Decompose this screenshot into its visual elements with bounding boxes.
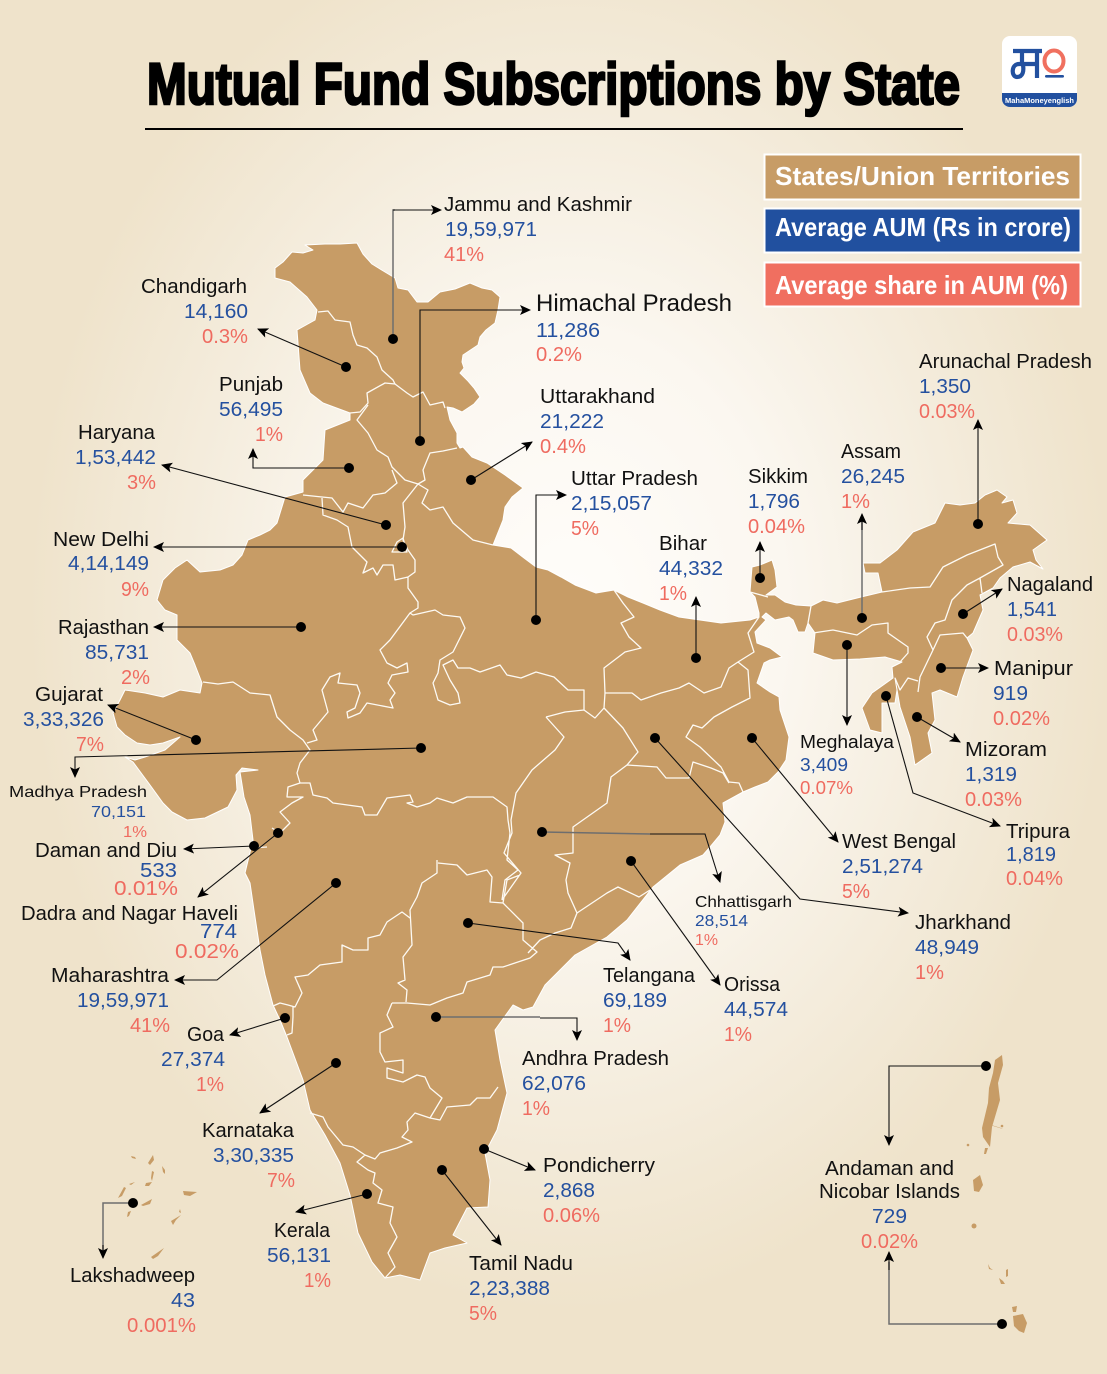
mainland xyxy=(113,243,1047,1280)
callout: Karnataka xyxy=(202,1058,341,1192)
callout: Uttar Pradesh xyxy=(531,468,698,625)
callout: Jammu and Kashmir: 41% xyxy=(444,244,484,266)
callout: Telangana: Telangana xyxy=(603,965,696,987)
callout: Lakshadweep: 0.001% xyxy=(127,1315,196,1337)
callout: West Bengal: 2,51,274 xyxy=(842,856,923,878)
callout: Arunachal Pradesh xyxy=(919,351,1092,529)
callout: Chandigarh xyxy=(141,276,351,372)
callout: Andhra Pradesh: 62,076 xyxy=(522,1073,586,1095)
callout: Assam: Assam xyxy=(841,441,901,463)
callout: Andhra Pradesh xyxy=(431,1012,669,1120)
callout: Tamil Nadu: 2,23,388 xyxy=(469,1278,550,1300)
callout: Meghalaya xyxy=(800,640,895,798)
callout: Pondicherry: Pondicherry xyxy=(543,1155,655,1177)
callout: Bihar: Bihar xyxy=(659,533,707,555)
callout: Meghalaya: Meghalaya xyxy=(800,732,895,752)
callout: Andhra Pradesh: Andhra Pradesh xyxy=(522,1048,669,1070)
callout: Goa: 1% xyxy=(196,1074,224,1096)
callout: New Delhi xyxy=(53,529,407,601)
callout: Mizoram: Mizoram xyxy=(965,739,1047,761)
callout: Punjab: 56,495 xyxy=(219,399,283,421)
legend xyxy=(764,154,1080,306)
callout: Haryana: 3% xyxy=(127,472,156,494)
callout: Sikkim: 0.04% xyxy=(748,516,805,538)
callout: Daman and Diu: 0.01% xyxy=(114,878,178,900)
callout: Chhattisgarh: 1% xyxy=(695,932,718,949)
islands: Andaman and Nicobar xyxy=(967,1055,1027,1333)
callout: Andaman and Nicobar Islands: Andaman and xyxy=(825,1158,954,1180)
callout: Tripura xyxy=(881,691,1071,890)
callout: Arunachal Pradesh: Arunachal Pradesh xyxy=(919,351,1092,373)
callout: Tripura: 1,819 xyxy=(1006,844,1056,866)
callout: Dadra and Nagar Haveli xyxy=(21,828,283,963)
legend: average share xyxy=(764,262,1080,306)
callout: Arunachal Pradesh: 0.03% xyxy=(919,401,975,423)
callout: West Bengal: West Bengal xyxy=(842,831,956,853)
callout: Bihar xyxy=(659,533,723,663)
legend: average share: Average share in AUM (%) xyxy=(775,270,1068,300)
callout: Mizoram: 1,319 xyxy=(965,764,1017,786)
callout: Andaman and Nicobar Islands: Nicobar Islands xyxy=(819,1181,960,1203)
callout: Jammu and Kashmir: Jammu and Kashmir xyxy=(444,194,632,216)
callout: Tripura: 0.04% xyxy=(1006,868,1063,890)
callout: Karnataka: 7% xyxy=(267,1170,295,1192)
callout: Manipur xyxy=(936,658,1073,730)
callout: Dadra and Nagar Haveli: 774 xyxy=(200,921,237,943)
callout: Kerala: 1% xyxy=(304,1270,331,1292)
callout: Dadra and Nagar Haveli: 0.02% xyxy=(175,941,239,963)
callout: Chhattisgarh xyxy=(537,827,792,949)
callout: Andaman and Nicobar Islands: 0.02% xyxy=(861,1231,918,1253)
callout: Rajasthan xyxy=(58,617,306,689)
callout: Meghalaya: 3,409 xyxy=(800,755,848,775)
callout: Nagaland: 0.03% xyxy=(1007,624,1063,646)
callout: Chhattisgarh: Chhattisgarh xyxy=(695,894,792,911)
logo: MahaMoneyenglish xyxy=(1005,96,1074,105)
callout: Jammu and Kashmir: 19,59,971 xyxy=(445,219,537,241)
callout: Uttarakhand: Uttarakhand xyxy=(540,386,655,408)
callout: Manipur: 0.02% xyxy=(993,708,1050,730)
callout: Manipur: 919 xyxy=(993,683,1028,705)
legend: average AUM xyxy=(764,208,1080,252)
callout: Daman and Diu: Daman and Diu xyxy=(35,840,177,862)
callout: Meghalaya: 0.07% xyxy=(800,778,853,798)
callout: Kerala xyxy=(267,1189,372,1292)
callout: Uttarakhand xyxy=(466,386,655,485)
callout: Dadra and Nagar Haveli: Dadra and Nagar Haveli xyxy=(21,903,238,925)
callout: Pondicherry xyxy=(479,1144,655,1227)
callout: Assam: 26,245 xyxy=(841,466,905,488)
callout: Lakshadweep: Lakshadweep xyxy=(70,1265,195,1287)
callout: Daman and Diu xyxy=(35,840,259,900)
callout: Jharkhand: Jharkhand xyxy=(915,912,1011,934)
callout: Daman and Diu: 533 xyxy=(140,860,177,882)
callout: Bihar: 44,332 xyxy=(659,558,723,580)
callout: Rajasthan: 2% xyxy=(121,667,150,689)
callout: Madhya Pradesh xyxy=(9,743,426,841)
callout: Maharashtra: Maharashtra xyxy=(51,965,170,987)
callout: Sikkim xyxy=(748,466,808,583)
callout: Haryana: Haryana xyxy=(78,422,156,444)
callout: Madhya Pradesh: Madhya Pradesh xyxy=(9,784,147,801)
callout: Himachal Pradesh: 0.2% xyxy=(536,344,582,366)
callout: Andaman and Nicobar Islands: 729 xyxy=(872,1206,907,1228)
callout: Karnataka: 3,30,335 xyxy=(213,1145,294,1167)
callout: Orissa: 44,574 xyxy=(724,999,788,1021)
callout: Punjab: 1% xyxy=(255,424,283,446)
callout: Himachal Pradesh: Himachal Pradesh xyxy=(536,290,732,317)
callout: Lakshadweep: 43 xyxy=(171,1290,195,1312)
callout: Tamil Nadu: 5% xyxy=(469,1303,497,1325)
callout: West Bengal: 5% xyxy=(842,881,870,903)
callout: Uttarakhand: 0.4% xyxy=(540,436,586,458)
callout: Maharashtra: 41% xyxy=(130,1015,170,1037)
callout: Uttar Pradesh: Uttar Pradesh xyxy=(571,468,698,490)
callout: Gujarat: 7% xyxy=(76,734,104,756)
callout: Mizoram xyxy=(912,712,1047,811)
callout: New Delhi: 9% xyxy=(121,579,149,601)
callout: Telangana: 1% xyxy=(603,1015,631,1037)
map of India xyxy=(113,243,1047,1280)
callout: New Delhi: New Delhi xyxy=(53,529,149,551)
callout: Pondicherry: 0.06% xyxy=(543,1205,600,1227)
callout: Telangana: 69,189 xyxy=(603,990,667,1012)
callout: Maharashtra: 19,59,971 xyxy=(77,990,169,1012)
callout: Chandigarh: 0.3% xyxy=(202,326,248,348)
callout: Uttarakhand: 21,222 xyxy=(540,411,604,433)
callout: Maharashtra xyxy=(51,878,341,1037)
callout: Pondicherry: 2,868 xyxy=(543,1180,595,1202)
callout: Uttar Pradesh: 5% xyxy=(571,518,599,540)
callout: Punjab: Punjab xyxy=(219,374,283,396)
callout: Haryana: 1,53,442 xyxy=(75,447,156,469)
callout: Assam xyxy=(841,441,905,623)
callout: Tamil Nadu xyxy=(437,1165,573,1325)
callout: Orissa xyxy=(626,856,788,1046)
callout: Madhya Pradesh: 1% xyxy=(123,824,147,841)
callout: Gujarat: Gujarat xyxy=(35,684,103,706)
callout: Tamil Nadu: Tamil Nadu xyxy=(469,1253,573,1275)
callout: Punjab xyxy=(219,374,354,473)
callout: Arunachal Pradesh: 1,350 xyxy=(919,376,971,398)
callout: Gujarat: 3,33,326 xyxy=(23,709,104,731)
callout: Kerala: Kerala xyxy=(274,1220,331,1242)
legend: states: States/Union Territories xyxy=(775,161,1070,191)
title underline xyxy=(145,128,963,130)
callout: Goa xyxy=(161,1013,290,1096)
callout: Chhattisgarh: 28,514 xyxy=(695,913,748,930)
callout: Nagaland: Nagaland xyxy=(1007,574,1093,596)
callout: Jharkhand: 1% xyxy=(915,962,944,984)
callout: Madhya Pradesh: 70,151 xyxy=(91,804,146,821)
callout: Rajasthan: Rajasthan xyxy=(58,617,149,639)
callout: Chandigarh: Chandigarh xyxy=(141,276,247,298)
title: Mutual Fund Subscriptions by State xyxy=(147,52,960,117)
callout: Orissa: Orissa xyxy=(724,974,781,996)
callout: Himachal Pradesh xyxy=(415,290,732,446)
callout: Jharkhand xyxy=(650,733,1011,984)
callout: Manipur: Manipur xyxy=(994,658,1073,680)
callout: Andaman and Nicobar Islands xyxy=(819,1061,1007,1329)
callout: Gujarat xyxy=(23,684,201,756)
callout: Goa: 27,374 xyxy=(161,1049,225,1071)
callout: Assam: 1% xyxy=(841,491,870,513)
callout: Andhra Pradesh: 1% xyxy=(522,1098,550,1120)
callout: Sikkim: Sikkim xyxy=(748,466,808,488)
callout: New Delhi: 4,14,149 xyxy=(68,553,149,575)
callout: Mizoram: 0.03% xyxy=(965,789,1022,811)
callout: Haryana xyxy=(75,422,391,530)
callout: Rajasthan: 85,731 xyxy=(85,642,149,664)
callout: Tripura: Tripura xyxy=(1006,821,1071,843)
callout: Lakshadweep xyxy=(70,1198,196,1337)
callout: Telangana xyxy=(463,918,696,1037)
legend: states xyxy=(764,154,1080,200)
callout: Uttar Pradesh: 2,15,057 xyxy=(571,493,652,515)
callout: Chandigarh: 14,160 xyxy=(184,301,248,323)
callout: Orissa: 1% xyxy=(724,1024,752,1046)
callout: West Bengal xyxy=(747,733,956,903)
callout: Nagaland: 1,541 xyxy=(1007,599,1057,621)
callout: Nagaland xyxy=(958,574,1093,646)
legend: average AUM: Average AUM (Rs in crore) xyxy=(775,212,1071,242)
callout: Sikkim: 1,796 xyxy=(748,491,800,513)
callout: Kerala: 56,131 xyxy=(267,1245,331,1267)
callout: Himachal Pradesh: 11,286 xyxy=(536,320,600,342)
callout: Karnataka: Karnataka xyxy=(202,1120,295,1142)
callout: Jharkhand: 48,949 xyxy=(915,937,979,959)
callout: Goa: Goa xyxy=(187,1024,225,1046)
callout: Bihar: 1% xyxy=(659,583,687,605)
logo xyxy=(1002,36,1077,107)
callout: Jammu and Kashmir xyxy=(388,194,632,344)
islands: Lakshadweep xyxy=(118,1155,197,1259)
